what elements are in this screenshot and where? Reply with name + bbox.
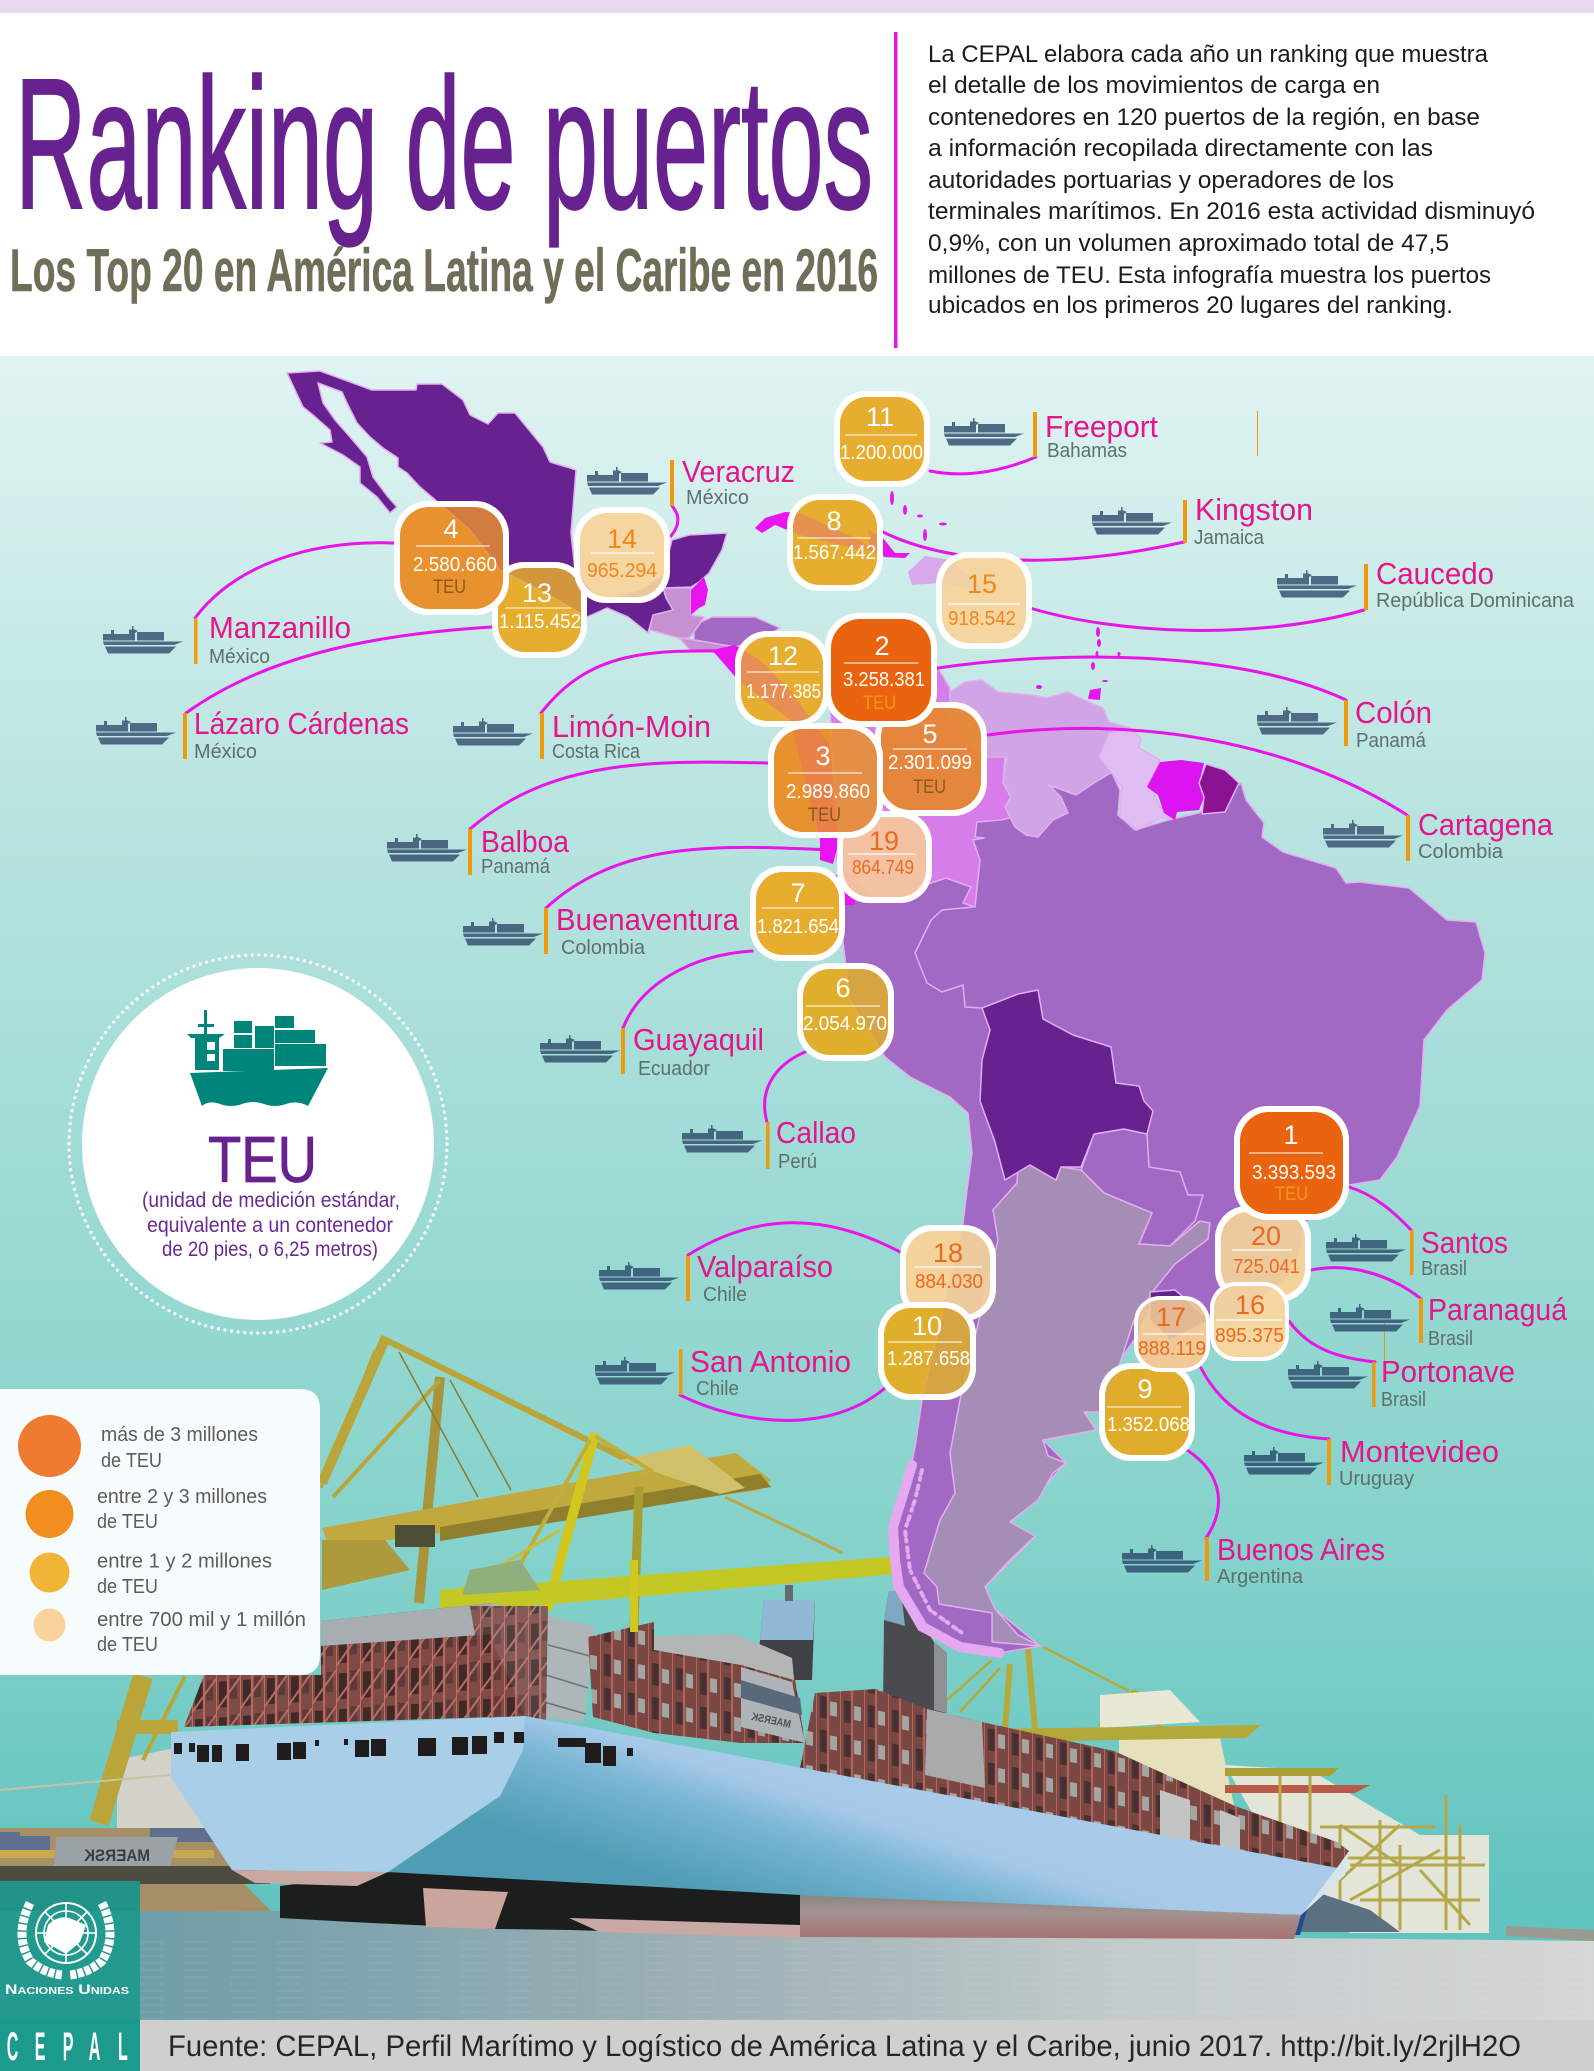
connector: Cartagena bbox=[988, 728, 1407, 815]
port 5: 2.301.099 bbox=[888, 752, 972, 774]
port 10: 1.287.658 bbox=[887, 1348, 970, 1370]
Jamaica bbox=[868, 530, 910, 558]
Guatemala bbox=[648, 588, 704, 638]
intro text: autoridades portuarias y operadores de los bbox=[928, 167, 1394, 194]
French Guiana bbox=[1199, 764, 1239, 814]
label: Colón: Panamá bbox=[1356, 730, 1427, 752]
label: Buenaventura: Buenaventura bbox=[556, 902, 740, 937]
crane B bbox=[460, 1433, 843, 1627]
Belize bbox=[691, 577, 708, 615]
legend: entre 1 y 2 millones: de TEU bbox=[97, 1576, 158, 1598]
legend: entre 1 y 2 millones bbox=[30, 1550, 272, 1598]
legend panel bbox=[0, 1389, 320, 1675]
TEU definition: (unidad de medición estándar, bbox=[142, 1189, 400, 1212]
port 18 bbox=[900, 1225, 996, 1320]
port 6 bbox=[797, 963, 894, 1061]
label: Cartagena bbox=[1323, 807, 1554, 863]
port 3: 3 bbox=[815, 741, 831, 771]
white disc bbox=[82, 968, 434, 1320]
Mexico bbox=[287, 371, 727, 633]
port 1 bbox=[1234, 1106, 1349, 1220]
connector: Buenaventura bbox=[546, 847, 830, 908]
TEU definition: equivalente a un contenedor bbox=[147, 1214, 393, 1237]
label: Manzanillo: México bbox=[209, 646, 270, 668]
footer band bbox=[140, 2020, 1594, 2071]
port 17 bbox=[1134, 1296, 1210, 1372]
Honduras bbox=[694, 617, 780, 647]
label: Valparaíso bbox=[599, 1249, 833, 1306]
legend: entre 700 mil y 1 millón: de TEU bbox=[97, 1634, 158, 1656]
connector: Lázaro Cárdenas bbox=[186, 627, 492, 713]
label: Cartagena: Colombia bbox=[1418, 841, 1504, 863]
label: Balboa: Balboa bbox=[481, 824, 570, 859]
label: Limón-Moin: Costa Rica bbox=[552, 741, 641, 763]
bottom paint bbox=[569, 1918, 800, 1938]
label: Kingston: Jamaica bbox=[1194, 527, 1265, 549]
connector: Buenos Aires bbox=[1187, 1450, 1218, 1538]
connector: Santos bbox=[1349, 1187, 1411, 1230]
icon: container ship bbox=[187, 1010, 328, 1106]
label: Montevideo: Uruguay bbox=[1339, 1468, 1414, 1490]
label: Paranaguá: Paranaguá bbox=[1428, 1292, 1568, 1327]
far cranes bbox=[1225, 1765, 1489, 1935]
Hispaniola bbox=[908, 556, 985, 590]
label: Colón: Colón bbox=[1355, 695, 1432, 730]
intro text bbox=[928, 41, 1535, 319]
port 2: 2 bbox=[874, 631, 890, 661]
connector: Limón-Moin bbox=[541, 651, 736, 713]
port 15 bbox=[936, 552, 1032, 649]
port 7: 1.821.654 bbox=[757, 916, 839, 938]
port 11 bbox=[834, 391, 930, 487]
label: Guayaquil: Ecuador bbox=[638, 1058, 710, 1080]
crane C bbox=[947, 1647, 1185, 1729]
crane A boom bbox=[322, 1445, 771, 1590]
label: Manzanillo: Manzanillo bbox=[209, 610, 351, 645]
port 4 bbox=[394, 501, 509, 615]
label: Guayaquil: Guayaquil bbox=[633, 1022, 764, 1057]
label: Buenos Aires: Argentina bbox=[1217, 1566, 1304, 1588]
port 3: 2.989.860 bbox=[786, 781, 870, 803]
connector: Guayaquil bbox=[623, 951, 752, 1028]
port 4: TEU bbox=[433, 577, 466, 598]
funnel tower bbox=[883, 1591, 947, 1713]
label: Colón bbox=[1257, 695, 1432, 752]
port 3 bbox=[768, 723, 883, 838]
label: Veracruz: México bbox=[686, 487, 749, 509]
boot topping bbox=[800, 1895, 1301, 1939]
label: Caucedo: República Dominicana bbox=[1376, 590, 1575, 612]
Bolivia bbox=[980, 990, 1153, 1180]
port 2 bbox=[825, 613, 937, 727]
port 1: 3.393.593 bbox=[1252, 1162, 1336, 1184]
crane C boom and cabin bbox=[987, 1690, 1261, 1810]
El Salvador and Nicaragua bbox=[679, 638, 735, 655]
intro text: millones de TEU. Esta infografía muestra los puertos bbox=[928, 262, 1491, 289]
port 13: 13 bbox=[522, 578, 552, 608]
label: Santos bbox=[1326, 1225, 1508, 1280]
far left dock: MAERSK bbox=[83, 1846, 150, 1865]
label: Callao: Perú bbox=[778, 1151, 817, 1173]
port 14: 14 bbox=[607, 524, 637, 554]
label: San Antonio bbox=[595, 1344, 851, 1400]
port 1: TEU bbox=[1275, 1184, 1308, 1205]
connector: Balboa bbox=[470, 762, 768, 829]
label: Portonave bbox=[1288, 1354, 1515, 1411]
connector: Callao bbox=[765, 1052, 805, 1122]
intro text: La CEPAL elabora cada año un ranking que muestra bbox=[928, 41, 1489, 68]
stern windows bbox=[174, 1732, 633, 1766]
port 1: 1 bbox=[1283, 1120, 1299, 1150]
intro text: terminales marítimos. En 2016 esta actividad disminuyó bbox=[928, 198, 1535, 225]
Caribbean islets bbox=[890, 491, 1120, 700]
TEU definition bbox=[142, 1189, 400, 1261]
port 15: 918.542 bbox=[948, 608, 1016, 630]
water bbox=[140, 1911, 1594, 2020]
port 4: 2.580.660 bbox=[413, 554, 497, 576]
Ecuador sliver bbox=[833, 875, 855, 905]
label: Balboa: Panamá bbox=[481, 856, 551, 878]
Suriname bbox=[1147, 760, 1204, 820]
connector: Kingston bbox=[883, 532, 1184, 560]
label: Valparaíso: Chile bbox=[703, 1284, 747, 1306]
connector: Valparaíso bbox=[688, 1223, 900, 1255]
port 2: TEU bbox=[863, 693, 896, 714]
subtitle: Los Top 20 en América Latina y el Caribe en 2016 bbox=[10, 237, 878, 304]
label: Callao: Callao bbox=[776, 1115, 856, 1150]
label: Veracruz: Veracruz bbox=[682, 454, 795, 489]
port 20 bbox=[1215, 1206, 1311, 1301]
grey top containers bbox=[321, 1603, 494, 1646]
hairline near Freeport bbox=[1257, 411, 1258, 456]
hull side bbox=[388, 1716, 1337, 1915]
label: Paranaguá bbox=[1330, 1292, 1568, 1350]
rudder bbox=[423, 1888, 508, 1929]
port 16: 895.375 bbox=[1215, 1325, 1284, 1347]
port 20: 20 bbox=[1251, 1221, 1281, 1251]
TEU definition: de 20 pies, o 6,25 metros) bbox=[162, 1238, 378, 1261]
legend: entre 700 mil y 1 millón bbox=[34, 1608, 306, 1656]
label: Balboa bbox=[387, 824, 570, 878]
legend: entre 2 y 3 millones: entre 2 y 3 millones bbox=[97, 1486, 267, 1508]
connector: Veracruz bbox=[671, 506, 678, 536]
label: Lázaro Cárdenas: Lázaro Cárdenas bbox=[194, 706, 409, 741]
port 17: 888.119 bbox=[1138, 1338, 1206, 1360]
intro text: el detalle de los movimientos de carga en bbox=[928, 72, 1380, 99]
port 20: 725.041 bbox=[1233, 1256, 1300, 1278]
legend: entre 1 y 2 millones: entre 1 y 2 millones bbox=[97, 1550, 272, 1572]
port 9: 9 bbox=[1137, 1374, 1153, 1404]
lashing bridge 3 bbox=[588, 1622, 654, 1733]
ship hull bbox=[171, 1716, 1349, 1939]
Colombia bbox=[830, 668, 1013, 907]
port 5 bbox=[875, 702, 987, 816]
port 19: 864.749 bbox=[852, 857, 914, 879]
label: Caucedo: Caucedo bbox=[1376, 556, 1494, 591]
Costa Rica and Panama bbox=[712, 645, 838, 864]
source line: Fuente: CEPAL, Perfil Marítimo y Logístico de América Latina y el Caribe, junio 2017. http://bit.ly/2rjlH2O bbox=[168, 2030, 1521, 2063]
port 15: 15 bbox=[967, 569, 997, 599]
port 8: 1.567.442 bbox=[793, 542, 876, 564]
port 9 bbox=[1099, 1363, 1195, 1461]
connector: Montevideo bbox=[1201, 1368, 1329, 1439]
Uruguay bbox=[1150, 1290, 1210, 1340]
dotted ring bbox=[69, 955, 447, 1333]
port 6: 2.054.970 bbox=[803, 1013, 887, 1035]
title: Ranking de puertos bbox=[15, 41, 873, 248]
Peru-Brazil border bbox=[915, 907, 982, 1008]
TEU callout circle bbox=[69, 955, 447, 1333]
connector: Freeport bbox=[930, 457, 1036, 474]
label: San Antonio: San Antonio bbox=[690, 1344, 851, 1379]
label: Lázaro Cárdenas bbox=[96, 706, 409, 763]
port 14: 965.294 bbox=[587, 560, 657, 582]
port 5: 5 bbox=[922, 719, 938, 749]
mid containers: MAERSK bbox=[750, 1711, 792, 1731]
legend: entre 700 mil y 1 millón: entre 700 mil y 1 millón bbox=[97, 1609, 306, 1631]
vertical rule bbox=[894, 32, 898, 348]
port 16: 16 bbox=[1235, 1290, 1265, 1320]
connector: Portonave bbox=[1289, 1321, 1375, 1362]
mid containers bbox=[654, 1634, 805, 1743]
label: Kingston bbox=[1092, 492, 1313, 549]
label: Montevideo bbox=[1244, 1434, 1499, 1490]
Paraguay bbox=[1081, 1129, 1203, 1246]
label: Guayaquil bbox=[540, 1022, 764, 1080]
intro text: 0,9%, con un volumen aproximado total de 47,5 bbox=[928, 230, 1449, 257]
label: Callao bbox=[682, 1115, 856, 1173]
intro text: contenedores en 120 puertos de la región, en base bbox=[928, 104, 1480, 131]
intro text: a información recopilada directamente con las bbox=[928, 135, 1433, 162]
stern face bbox=[171, 1716, 525, 1872]
connector: Colón bbox=[938, 657, 1346, 700]
Cuba bbox=[755, 512, 875, 552]
legend: entre 2 y 3 millones: de TEU bbox=[97, 1511, 158, 1533]
connector: Manzanillo bbox=[195, 543, 394, 618]
port 7: 7 bbox=[790, 878, 806, 908]
label: Limón-Moin: Limón-Moin bbox=[552, 709, 711, 744]
label: Lázaro Cárdenas: México bbox=[194, 741, 257, 763]
header panel bbox=[0, 0, 1594, 356]
label: Kingston: Kingston bbox=[1195, 492, 1313, 527]
dock right bbox=[1506, 1926, 1594, 1941]
bridge tower 1 bbox=[756, 1585, 815, 1680]
label: Caucedo bbox=[1277, 556, 1575, 612]
label: Freeport bbox=[944, 409, 1158, 462]
label: San Antonio: Chile bbox=[696, 1378, 739, 1400]
Guyana bbox=[1099, 728, 1177, 830]
legend: entre 2 y 3 millones bbox=[26, 1486, 267, 1538]
port 12 bbox=[735, 631, 828, 727]
port 10: 10 bbox=[912, 1311, 942, 1341]
port 14 bbox=[574, 507, 670, 603]
label: Santos: Brasil bbox=[1421, 1258, 1467, 1280]
connector: Paranaguá bbox=[1311, 1268, 1420, 1298]
map of Latin America bbox=[287, 371, 1485, 1653]
bow flare bbox=[1301, 1851, 1349, 1915]
keel shadow bbox=[280, 1872, 800, 1937]
label: Manzanillo bbox=[103, 610, 351, 668]
left container deck bbox=[184, 1603, 525, 1727]
crane B boom bbox=[440, 1556, 907, 1614]
port 12: 1.177.385 bbox=[746, 681, 821, 703]
port 5: TEU bbox=[913, 777, 946, 798]
crane B top foot on deck bbox=[630, 1560, 638, 1632]
right container deck bbox=[800, 1689, 1349, 1868]
intro text: ubicados en los primeros 20 lugares del ranking. bbox=[928, 292, 1453, 319]
port 18: 18 bbox=[933, 1238, 963, 1268]
green machinery block bbox=[462, 1560, 540, 1595]
port 2: 3.258.381 bbox=[843, 669, 925, 691]
legend: más de 3 millones: más de 3 millones bbox=[101, 1424, 258, 1446]
label: Buenos Aires: Buenos Aires bbox=[1217, 1532, 1385, 1567]
port 16 bbox=[1210, 1282, 1289, 1361]
port 8: 8 bbox=[826, 506, 842, 536]
CEPAL wordmark: CEPAL bbox=[7, 2025, 128, 2069]
South America base: Brazil, Peru, Ecuador, Chile, Paraguay bbox=[838, 773, 1485, 1653]
port 19 bbox=[837, 811, 932, 903]
label: Paranaguá: Brasil bbox=[1428, 1328, 1473, 1350]
port 13 bbox=[492, 562, 587, 658]
Argentina bbox=[924, 1165, 1210, 1646]
port 12: 12 bbox=[768, 641, 798, 671]
logo block: Naciones Unidas and CEPAL bbox=[0, 1881, 140, 2071]
label: Portonave: Portonave bbox=[1381, 1354, 1515, 1389]
label: Valparaíso: Valparaíso bbox=[697, 1249, 833, 1284]
TEU heading: TEU bbox=[208, 1123, 317, 1196]
label: Freeport: Freeport bbox=[1045, 409, 1158, 444]
port 6: 6 bbox=[835, 973, 851, 1003]
port 18: 884.030 bbox=[915, 1271, 983, 1293]
label: Buenaventura: Colombia bbox=[561, 937, 646, 959]
port 17: 17 bbox=[1156, 1302, 1186, 1332]
label: Portonave: Brasil bbox=[1381, 1389, 1426, 1411]
legend: más de 3 millones: de TEU bbox=[101, 1450, 162, 1472]
port 8 bbox=[787, 494, 883, 591]
photo: container ship and cranes bbox=[0, 1337, 1594, 2020]
port 19: 19 bbox=[869, 826, 899, 856]
port 11: 11 bbox=[866, 402, 894, 432]
port 7 bbox=[750, 866, 845, 961]
port 10 bbox=[878, 1302, 976, 1400]
stern bottom paint bbox=[232, 1870, 388, 1886]
connector: Caucedo bbox=[1030, 608, 1364, 630]
label: Santos: Santos bbox=[1421, 1225, 1508, 1260]
far left dock bbox=[0, 1745, 280, 1920]
port 13: 1.115.452 bbox=[499, 611, 581, 633]
icon: UN emblem bbox=[22, 1903, 110, 1975]
port 3: TEU bbox=[808, 805, 841, 826]
Chilean archipelago fringe bbox=[893, 1465, 1000, 1653]
Naciones Unidas text: Naciones Unidas bbox=[5, 1981, 129, 1997]
Venezuela bbox=[950, 680, 1130, 837]
label: Limón-Moin bbox=[453, 709, 711, 763]
label: Buenos Aires bbox=[1122, 1532, 1385, 1588]
label: Buenaventura bbox=[463, 902, 740, 959]
label: Montevideo: Montevideo bbox=[1340, 1434, 1499, 1469]
MAERSK container stack bbox=[470, 1603, 594, 1722]
port 11: 1.200.000 bbox=[840, 442, 923, 464]
connector: San Antonio bbox=[680, 1388, 885, 1420]
legend: más de 3 millones bbox=[18, 1415, 258, 1477]
crane A bbox=[0, 1337, 634, 1823]
label: Freeport: Bahamas bbox=[1047, 440, 1127, 462]
port 4: 4 bbox=[443, 514, 459, 544]
label: Veracruz bbox=[587, 454, 795, 509]
port 9: 1.352.068 bbox=[1107, 1414, 1190, 1436]
hairline near Portonave bbox=[1384, 1323, 1385, 1362]
label: Cartagena: Cartagena bbox=[1418, 807, 1554, 842]
